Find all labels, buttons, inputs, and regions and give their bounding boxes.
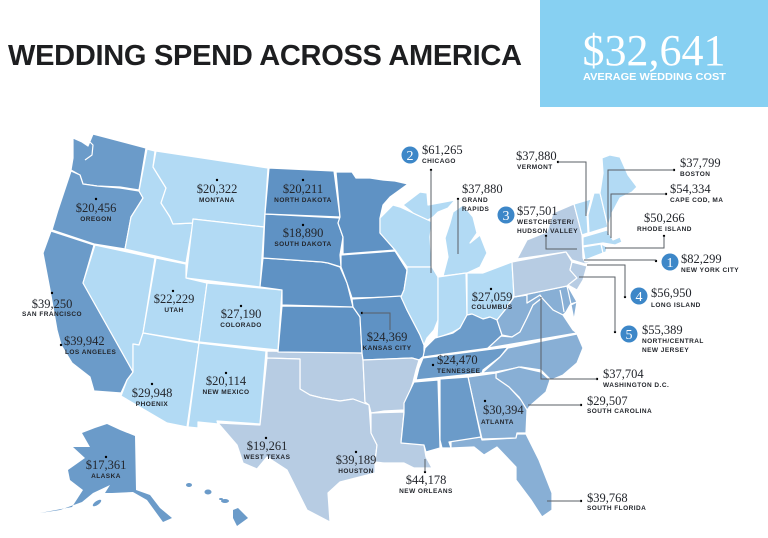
callout: Cape Cod: CAPE COD, MA — [670, 197, 723, 204]
callout: Long Island, rank 4: LONG ISLAND — [651, 302, 701, 309]
callout: Westchester / Hudson Valley, rank 3: $57,501 — [517, 204, 558, 218]
state: Nevada — [83, 245, 155, 372]
state: Minnesota — [336, 172, 408, 254]
callout: Rhode Island — [605, 211, 692, 248]
state: New Hampshire — [588, 193, 608, 233]
state: Washington — [71, 134, 146, 190]
callout: Los Angeles: $39,942 — [64, 334, 105, 348]
callout: Atlanta — [481, 400, 524, 426]
state: Utah — [143, 258, 207, 342]
panel: average wedding cost: AVERAGE WEDDING COST — [583, 72, 726, 83]
callout: West Texas — [244, 437, 291, 461]
callout: Tennessee: TENNESSEE — [437, 368, 481, 375]
callout: Tennessee — [432, 353, 481, 375]
state: Arkansas — [363, 358, 419, 413]
state: North Dakota — [265, 168, 340, 217]
callout: Kansas City — [361, 312, 412, 352]
callout: New Mexico — [202, 372, 250, 396]
callout: Columbus: COLUMBUS — [471, 304, 513, 311]
callout: Houston — [336, 451, 376, 475]
callout: Rhode Island: $50,266 — [644, 211, 685, 225]
callout: Atlanta: $30,394 — [483, 403, 524, 417]
callout: North Dakota — [274, 179, 332, 204]
callout: Chicago, rank 2: CHICAGO — [422, 158, 456, 165]
state: Arizona — [121, 333, 199, 427]
state: Rhode Island — [601, 244, 607, 253]
callout: New Orleans: NEW ORLEANS — [399, 488, 453, 495]
state: Massachusetts — [583, 230, 622, 246]
callout: Oregon: OREGON — [80, 216, 112, 223]
state: Michigan upper — [403, 192, 455, 220]
panel: average wedding cost — [540, 0, 768, 107]
callout: Colorado: COLORADO — [220, 322, 262, 329]
callout: South Florida: SOUTH FLORIDA — [587, 505, 646, 512]
callout: Grand Rapids: $37,880 — [462, 182, 503, 196]
callout: Washington D.C.: $37,704 — [603, 367, 644, 381]
callout: New York City, rank 1: 1 — [666, 256, 674, 271]
callout: North Dakota: NORTH DAKOTA — [274, 197, 332, 204]
callout: Grand Rapids — [457, 182, 503, 254]
state: Idaho — [125, 149, 193, 263]
map of US states — [40, 134, 637, 526]
callout: Boston: BOSTON — [680, 171, 710, 178]
callout: New York City, rank 1: NEW YORK CITY — [681, 267, 739, 274]
callout: Atlanta: ATLANTA — [481, 419, 514, 426]
state: Louisiana — [371, 412, 432, 468]
callout: New Mexico: $20,114 — [206, 374, 247, 388]
callout: Montana — [197, 179, 237, 204]
state: Kentucky — [423, 314, 502, 357]
callout: North/Central New Jersey, rank 5 — [579, 277, 704, 354]
callout: North/Central New Jersey, rank 5: NORTH/CENTRAL — [642, 338, 704, 345]
callout: New Orleans: $44,178 — [406, 473, 446, 487]
callout: Vermont — [516, 149, 586, 216]
callout: San Francisco — [22, 292, 82, 318]
callout: Vermont: VERMONT — [517, 164, 553, 171]
state: South Dakota — [263, 214, 343, 267]
state: Connecticut — [583, 244, 603, 260]
callout: Oregon — [76, 198, 116, 223]
state: New Jersey — [568, 262, 587, 290]
callout: Cape Cod — [611, 182, 723, 238]
state: Wisconsin — [380, 205, 432, 267]
callout: Long Island, rank 4 — [587, 265, 701, 309]
callout: Los Angeles — [60, 334, 117, 356]
callout: North/Central New Jersey, rank 5: $55,389 — [642, 323, 683, 337]
callout: West Texas: $19,261 — [247, 439, 287, 453]
callout: Utah: UTAH — [164, 307, 184, 314]
callout: Boston — [608, 156, 721, 235]
callout: San Francisco: $39,250 — [32, 297, 72, 311]
callout: Rhode Island: RHODE ISLAND — [637, 226, 692, 233]
callout: South Carolina — [528, 394, 652, 415]
state: Indiana — [437, 273, 467, 338]
callout: Alaska — [86, 456, 126, 480]
callout: North Dakota: $20,211 — [283, 182, 323, 196]
state: Virginia eastern shore — [571, 302, 577, 320]
callout: Houston: HOUSTON — [338, 468, 374, 475]
callout: Alaska: $17,361 — [86, 458, 126, 472]
callout: New Orleans — [399, 459, 453, 495]
icon: Kodiak island — [92, 498, 102, 508]
callout: San Francisco: SAN FRANCISCO — [22, 311, 82, 318]
callout: Columbus — [471, 288, 513, 311]
callout: Kansas City: KANSAS CITY — [362, 345, 412, 352]
callout: Westchester / Hudson Valley, rank 3: HUDSON VALLEY — [517, 228, 578, 235]
callout: South Florida — [547, 491, 646, 512]
state: Ohio — [467, 262, 514, 320]
callout: Long Island, rank 4: $56,950 — [651, 286, 692, 300]
callout: South Florida: $39,768 — [587, 491, 628, 505]
callout: North/Central New Jersey, rank 5: 5 — [626, 328, 632, 343]
callout: Colorado — [220, 305, 262, 329]
callout: Tennessee: $24,470 — [437, 353, 478, 367]
callout: West Texas: WEST TEXAS — [244, 454, 291, 461]
state: Maryland — [513, 286, 572, 315]
callout: Westchester / Hudson Valley, rank 3: WESTCHESTER/ — [517, 219, 574, 226]
Puget Sound and Chesapeake Bay — [85, 140, 564, 312]
callout: Washington D.C. — [541, 297, 669, 389]
state: Oklahoma — [267, 351, 369, 405]
state: Nebraska — [260, 258, 353, 307]
callout: Oregon: $20,456 — [76, 201, 116, 215]
state: Michigan lower — [443, 205, 487, 276]
callout: Chicago, rank 2: $61,265 — [422, 143, 463, 157]
state: Missouri — [352, 296, 424, 360]
callout: Long Island, rank 4: 4 — [636, 290, 642, 305]
callout: South Dakota: $18,890 — [283, 226, 323, 240]
callout: South Dakota: SOUTH DAKOTA — [274, 241, 332, 248]
state: Montana — [153, 151, 268, 227]
state: Georgia — [468, 373, 527, 439]
callout: South Carolina: SOUTH CAROLINA — [587, 408, 652, 415]
callout: Grand Rapids: RAPIDS — [462, 206, 489, 213]
state: Virginia — [488, 298, 577, 348]
state: Oregon — [52, 171, 143, 249]
callout: Alaska: ALASKA — [91, 473, 121, 480]
state: Alabama — [440, 377, 481, 448]
state: Iowa — [341, 251, 407, 298]
callout: Boston: $37,799 — [680, 156, 721, 170]
state: West Virginia — [497, 295, 542, 337]
callout: Houston: $39,189 — [336, 453, 376, 467]
callout: Vermont: $37,880 — [516, 149, 557, 163]
state: Maine — [600, 155, 637, 227]
state: New York — [517, 204, 602, 264]
callout: Columbus: $27,059 — [472, 290, 512, 304]
state: Mississippi — [401, 380, 440, 452]
callout: South Carolina: $29,507 — [587, 394, 628, 408]
callout: South Dakota — [274, 224, 332, 248]
state: New Mexico — [188, 343, 266, 428]
callout: Montana: MONTANA — [199, 197, 235, 204]
state: Texas — [218, 358, 377, 522]
callout: Phoenix: $29,948 — [132, 386, 172, 400]
callout: Westchester / Hudson Valley, rank 3: 3 — [502, 209, 510, 224]
callout: Phoenix: PHOENIX — [136, 401, 168, 408]
callout: Grand Rapids: GRAND — [462, 197, 488, 204]
callout: New York City, rank 1: $82,299 — [681, 252, 722, 266]
panel: average wedding cost: $32,641 — [582, 26, 726, 75]
callout: New Mexico: NEW MEXICO — [202, 389, 250, 396]
callout: Utah: $22,229 — [154, 292, 194, 306]
title: WEDDING SPEND ACROSS AMERICA — [8, 40, 522, 72]
state: North Carolina — [482, 334, 583, 380]
state: Wyoming — [186, 219, 264, 287]
callout: Utah — [154, 290, 194, 314]
callout: Washington D.C.: WASHINGTON D.C. — [603, 382, 669, 389]
callout: Phoenix — [132, 383, 172, 408]
callout: Kansas City: $24,369 — [367, 330, 407, 344]
state: Illinois — [401, 267, 438, 345]
callout: New York City, rank 1 — [584, 252, 739, 274]
callout: Cape Cod: $54,334 — [670, 182, 711, 196]
callout: Colorado: $27,190 — [221, 307, 261, 321]
callout: Westchester / Hudson Valley, rank 3 — [498, 204, 578, 249]
state: Kansas — [278, 306, 362, 353]
state: Delaware — [567, 286, 577, 304]
state: Hawaii — [186, 483, 248, 526]
callout: North/Central New Jersey, rank 5: NEW JERSEY — [642, 347, 689, 354]
state: Vermont — [574, 199, 591, 235]
state: Alaska — [40, 424, 172, 522]
callout: Chicago, rank 2: 2 — [406, 149, 414, 164]
callout: Chicago, rank 2 — [402, 143, 463, 273]
state: California — [43, 231, 133, 393]
state: Pennsylvania — [512, 252, 577, 297]
callout: Los Angeles: LOS ANGELES — [65, 349, 117, 356]
state: Tennessee — [416, 347, 508, 380]
state: Florida — [451, 434, 552, 517]
callout: Montana: $20,322 — [197, 182, 237, 196]
state: Colorado — [199, 283, 282, 350]
state: South Carolina — [496, 367, 550, 410]
